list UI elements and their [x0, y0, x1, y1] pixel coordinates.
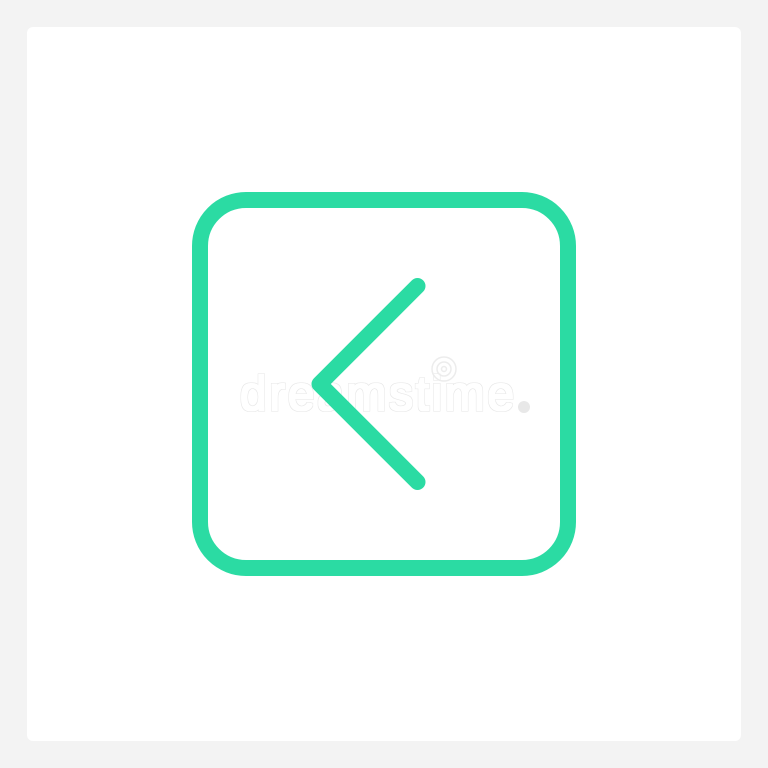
- chevron arrow: [320, 286, 418, 482]
- watermark: dreamstime.: [240, 368, 530, 421]
- rounded square outline: [200, 200, 568, 568]
